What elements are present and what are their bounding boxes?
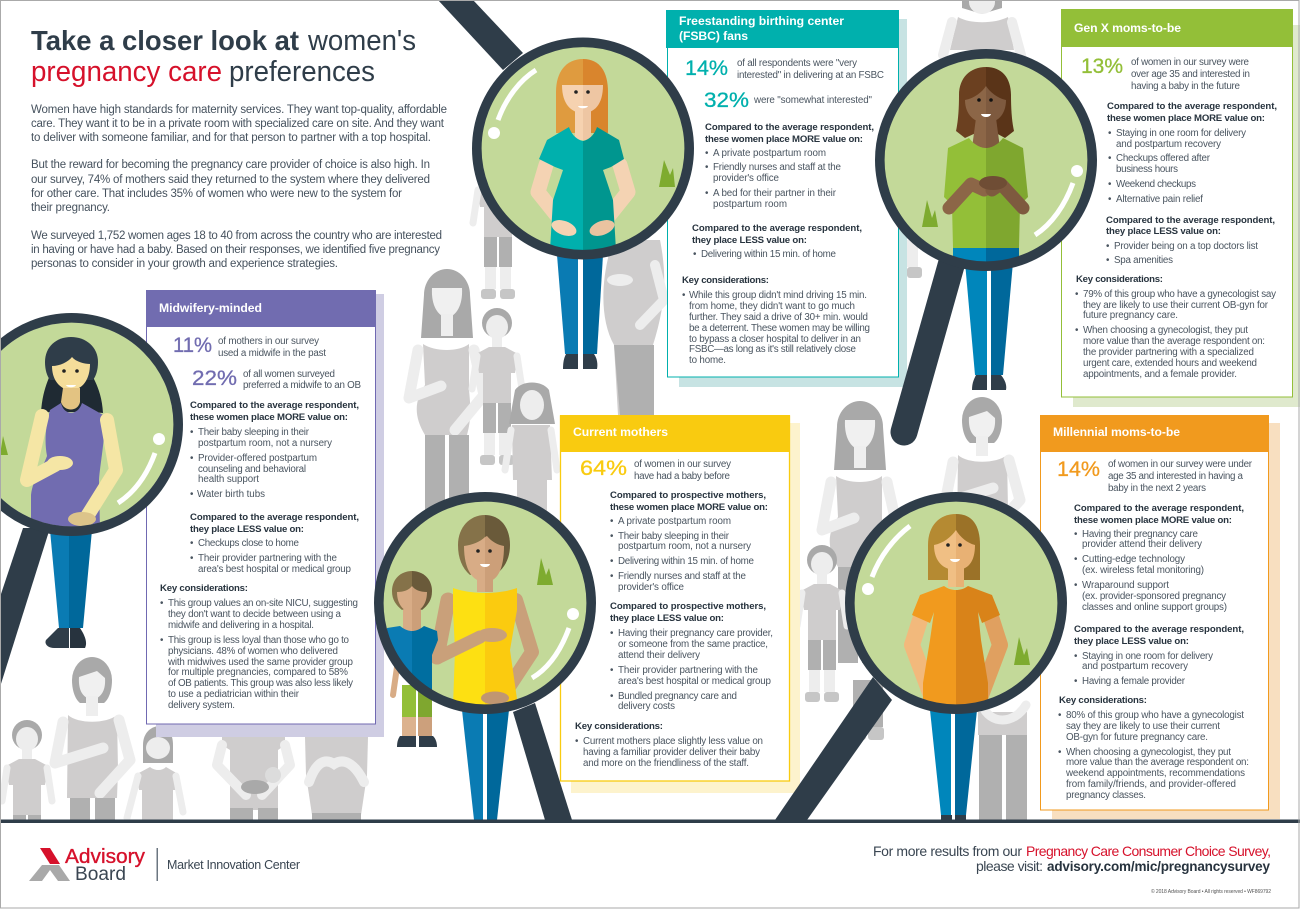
key considerations: from home, they didn't want to go much bbox=[689, 301, 855, 312]
list: less value: Provider being on a top doctors list bbox=[1114, 241, 1258, 252]
key considerations: 80% of this group who have a gynecologist bbox=[1066, 710, 1244, 721]
list: more value: and postpartum recovery bbox=[1116, 139, 1221, 150]
list: more value: these women place MORE value on: bbox=[190, 412, 348, 423]
key considerations bbox=[682, 275, 870, 366]
key considerations: • bbox=[682, 290, 686, 301]
woman in lens bbox=[922, 67, 1028, 262]
list: less value: delivery costs bbox=[618, 701, 675, 712]
list: less value: Their provider partnering with the bbox=[618, 665, 759, 676]
magnifier: Millennial mom-to-be bbox=[775, 497, 1062, 820]
key considerations: midwife and delivering in a hospital. bbox=[168, 620, 314, 631]
list: less value: they place LESS value on: bbox=[610, 613, 724, 624]
key considerations: they don't want to decide between using a bbox=[168, 609, 342, 620]
title bbox=[31, 25, 416, 88]
key considerations: of OB patients. This group was also less likely bbox=[168, 678, 353, 689]
title: Take a closer look at bbox=[31, 25, 299, 56]
magnifier: FSBC fan bbox=[438, 0, 689, 369]
key considerations: When choosing a gynecologist, they put bbox=[1066, 747, 1231, 758]
key considerations bbox=[160, 583, 358, 711]
stat: 14%: of all respondents were "very bbox=[737, 58, 857, 69]
lens highlight bbox=[118, 433, 165, 503]
list: more value: postpartum room bbox=[713, 199, 787, 210]
key considerations bbox=[1058, 695, 1249, 801]
list: more value: provider attend their delivery bbox=[1082, 539, 1202, 550]
list: more value: Weekend checkups bbox=[1116, 179, 1196, 190]
lens highlight bbox=[1035, 165, 1083, 235]
panel header: Millennial moms-to-be bbox=[1053, 425, 1180, 439]
list: more value: Cutting-edge technology bbox=[1082, 554, 1185, 565]
intro text: our survey, 74% of mothers said they returned to the system where they delivered bbox=[31, 174, 430, 186]
key considerations: OB-gyn for future pregnancy care. bbox=[1066, 732, 1208, 743]
panel header bbox=[666, 10, 899, 48]
stat: 14%: interested" in delivering at an FSBC bbox=[737, 70, 884, 81]
panel header: Freestanding birthing center bbox=[679, 14, 844, 28]
key considerations: with midwives used the same provider group bbox=[167, 657, 354, 668]
copyright: © 2018 Advisory Board • All rights reserved • WF869792 bbox=[1151, 888, 1271, 895]
logo: Advisory Board: Advisory bbox=[65, 846, 145, 868]
stat: 32%: 32% bbox=[704, 88, 749, 112]
key considerations: and more on the friendliness of the staff. bbox=[583, 758, 749, 769]
list: more value: Compared to the average respondent, bbox=[705, 122, 874, 133]
stat: 13%: over age 35 and interested in bbox=[1131, 69, 1250, 80]
list: less value: and postpartum recovery bbox=[1082, 661, 1188, 672]
key considerations: 79% of this group who have a gynecologist say bbox=[1083, 289, 1276, 300]
list: less value: • bbox=[610, 691, 614, 702]
stat: 14%: 14% bbox=[1057, 457, 1100, 481]
stat: 14%: age 35 and interested in having a bbox=[1108, 471, 1244, 482]
stat: 13% bbox=[1081, 54, 1250, 92]
lens bbox=[854, 501, 1058, 705]
list: less value: area's best hospital or medical group bbox=[198, 564, 352, 575]
intro text: to deliver with someone familiar, and for that person to partner with a top hospital. bbox=[31, 132, 431, 144]
list: more value: • bbox=[1108, 194, 1112, 205]
stat: 22%: of all women surveyed bbox=[243, 369, 335, 380]
list: more value: Water birth tubs bbox=[197, 489, 265, 500]
footer call to action: Pregnancy Care Consumer Choice Survey, bbox=[1026, 843, 1271, 859]
woman in lens bbox=[0, 337, 116, 530]
list: less value: • bbox=[1106, 241, 1110, 252]
list: less value: • bbox=[610, 665, 614, 676]
lens ring bbox=[379, 497, 591, 709]
list: more value: • bbox=[1074, 580, 1078, 591]
list: more value: • bbox=[1074, 554, 1078, 565]
list: less value: Compared to the average respondent, bbox=[1106, 215, 1275, 226]
list: less value: Their provider partnering with the bbox=[198, 553, 338, 564]
key considerations: Key considerations: bbox=[160, 583, 248, 594]
key considerations: Key considerations: bbox=[1059, 695, 1147, 706]
key considerations: • bbox=[575, 736, 579, 747]
woman in lens bbox=[538, 59, 675, 250]
stat: 32% bbox=[704, 88, 873, 112]
list: less value: Delivering within 15 min. of home bbox=[701, 249, 837, 260]
figure legs bbox=[557, 255, 603, 369]
list: less value: they place LESS value on: bbox=[1106, 226, 1221, 237]
panel drop shadow bbox=[1052, 423, 1280, 819]
magnifier: current mother and child bbox=[379, 497, 591, 820]
list: more value bbox=[190, 400, 359, 500]
lens bbox=[383, 501, 587, 705]
list: more value: Their baby sleeping in their bbox=[618, 531, 730, 542]
list: more value: • bbox=[610, 516, 614, 527]
key considerations: Key considerations: bbox=[682, 275, 769, 286]
stat: 64%: have had a baby before bbox=[634, 471, 731, 482]
footer call to action: For more results from our bbox=[873, 843, 1022, 859]
list: less value: • bbox=[1074, 651, 1078, 662]
figure legs bbox=[462, 710, 509, 820]
magnifier handle bbox=[438, 0, 523, 70]
stat: 64%: 64% bbox=[580, 456, 627, 480]
list: less value: Having a female provider bbox=[1082, 676, 1186, 687]
panel drop shadow bbox=[156, 294, 384, 737]
child lower body bbox=[393, 667, 437, 747]
list: less value: Bundled pregnancy care and bbox=[618, 691, 737, 702]
list: more value: A private postpartum room bbox=[618, 516, 731, 527]
key considerations: • bbox=[1075, 325, 1079, 336]
crowd of gray background figures bbox=[2, 0, 1027, 877]
list: more value: • bbox=[190, 427, 194, 438]
list: less value: they place LESS value on: bbox=[692, 235, 807, 246]
stat: 22% bbox=[192, 366, 361, 391]
panel header bbox=[146, 290, 376, 327]
list: more value: A private postpartum room bbox=[713, 148, 826, 159]
panel body bbox=[146, 291, 376, 724]
panel body bbox=[560, 416, 790, 781]
panel: Millennial moms-to-be bbox=[1040, 415, 1280, 819]
key considerations: having a familiar provider deliver their baby bbox=[583, 747, 760, 758]
mother and child in lens bbox=[385, 515, 553, 706]
stat: 22%: preferred a midwife to an OB bbox=[243, 380, 361, 391]
intro text: But the reward for becoming the pregnancy care provider of choice is also high. In bbox=[31, 159, 430, 171]
list: more value: business hours bbox=[1116, 164, 1178, 175]
panel drop shadow bbox=[679, 19, 907, 387]
panel header: Current mothers bbox=[573, 425, 668, 439]
list: more value: • bbox=[610, 556, 614, 567]
list: less value: Compared to the average respondent, bbox=[1074, 624, 1244, 635]
list: less value bbox=[692, 223, 862, 260]
key considerations: FSBC—as long as it's still relatively close bbox=[689, 344, 857, 355]
key considerations: Key considerations: bbox=[575, 721, 663, 732]
list: more value: • bbox=[705, 162, 709, 173]
intro text: Women have high standards for maternity services. They want top-quality, affordable bbox=[31, 104, 447, 116]
woman in lens bbox=[912, 514, 1030, 706]
list: less value: Compared to prospective mothers, bbox=[610, 601, 766, 612]
list: more value: Checkups offered after bbox=[1116, 153, 1211, 164]
key considerations: pregnancy classes. bbox=[1066, 790, 1146, 801]
key considerations: future pregnancy care. bbox=[1083, 310, 1178, 321]
list: more value: these women place MORE value on: bbox=[1107, 113, 1265, 124]
stat: 11%: used a midwife in the past bbox=[218, 348, 326, 359]
lens highlight bbox=[862, 526, 910, 595]
list: more value: Compared to the average respondent, bbox=[1074, 503, 1244, 514]
key considerations: • bbox=[1075, 289, 1079, 300]
lens highlight bbox=[532, 608, 579, 678]
footer call to action: advisory.com/mic/pregnancysurvey bbox=[1047, 859, 1270, 874]
magnifier handle bbox=[0, 528, 50, 687]
list: more value: these women place MORE value on: bbox=[705, 134, 863, 145]
list: less value: Compared to the average respondent, bbox=[692, 223, 862, 234]
key considerations: This group is less loyal than those who go to bbox=[168, 635, 350, 646]
list: more value: provider's office bbox=[618, 582, 685, 593]
key considerations: delivery system. bbox=[168, 700, 235, 711]
list: more value: • bbox=[1108, 153, 1112, 164]
footer bbox=[0, 820, 1300, 909]
panel body bbox=[1040, 416, 1268, 810]
key considerations: Key considerations: bbox=[1076, 274, 1163, 285]
list: more value: Alternative pain relief bbox=[1116, 194, 1203, 205]
lens bbox=[884, 58, 1088, 262]
logo: Advisory Board: Market Innovation Center bbox=[167, 858, 300, 872]
key considerations: to bypass a closer hospital to deliver in an bbox=[689, 334, 861, 345]
key considerations: to use a pediatrician within their bbox=[168, 689, 300, 700]
list: less value: Checkups close to home bbox=[198, 538, 300, 549]
figure legs bbox=[930, 710, 977, 820]
list: more value: health support bbox=[198, 474, 259, 485]
list: less value: • bbox=[1106, 255, 1110, 266]
stat: 11% bbox=[173, 333, 326, 359]
stat: 64% bbox=[580, 456, 731, 482]
logo: Advisory Board bbox=[29, 846, 300, 885]
panel drop shadow bbox=[1073, 25, 1300, 407]
key considerations: more value than the average respondent on: bbox=[1083, 336, 1265, 347]
key considerations: While this group didn't mind driving 15 min. bbox=[689, 290, 867, 301]
stat: 14%: baby in the next 2 years bbox=[1108, 483, 1206, 494]
list: less value: attend their delivery bbox=[618, 650, 700, 661]
list: more value: (ex. provider-sponsored pregnancy bbox=[1082, 591, 1226, 602]
title: preferences bbox=[229, 56, 375, 88]
figure legs bbox=[965, 262, 1013, 390]
logo: Advisory Board: Board bbox=[75, 864, 126, 885]
list: more value: Delivering within 15 min. of home bbox=[618, 556, 755, 567]
list: more value: Compared to the average respondent, bbox=[1107, 101, 1277, 112]
stat: 13%: having a baby in the future bbox=[1131, 81, 1241, 92]
stat: 14% bbox=[685, 56, 884, 81]
panel: Gen X moms-to-be bbox=[1061, 9, 1300, 407]
key considerations: Current mothers place slightly less value on bbox=[583, 736, 763, 747]
list: less value: Staying in one room for delivery bbox=[1082, 651, 1213, 662]
list: more value: • bbox=[610, 571, 614, 582]
stat: 22%: 22% bbox=[192, 366, 237, 390]
footer background and rule bbox=[0, 820, 1300, 909]
key considerations: weekend appointments, recommendations bbox=[1065, 768, 1245, 779]
lens ring bbox=[477, 42, 689, 255]
key considerations: When choosing a gynecologist, they put bbox=[1083, 325, 1248, 336]
stat: 13%: 13% bbox=[1081, 54, 1123, 78]
panel: Current mothers bbox=[560, 415, 800, 793]
list: less value bbox=[1074, 624, 1244, 687]
lens ring bbox=[850, 497, 1062, 709]
list: more value: • bbox=[705, 188, 709, 199]
key considerations: This group values an on-site NICU, suggesting bbox=[168, 598, 358, 609]
key considerations bbox=[575, 721, 763, 769]
stat: 14% bbox=[1057, 457, 1253, 494]
footer call to action: please visit: bbox=[976, 858, 1043, 874]
magnifier: midwifery-minded woman bbox=[0, 318, 178, 687]
list: less value: they place LESS value on: bbox=[190, 524, 304, 535]
key considerations: further. They said a drive of 30+ min. would bbox=[689, 312, 868, 323]
intro text: their pregnancy. bbox=[31, 202, 110, 214]
stat: 14%: of women in our survey were under bbox=[1108, 459, 1253, 470]
list: more value: • bbox=[190, 489, 194, 500]
magnifier handle bbox=[513, 703, 572, 820]
list: less value bbox=[190, 512, 359, 575]
list: less value: • bbox=[190, 553, 194, 564]
panel header: Gen X moms-to-be bbox=[1074, 21, 1181, 35]
intro text: We surveyed 1,752 women ages 18 to 40 from across the country who are interested bbox=[31, 230, 442, 242]
list: less value: they place LESS value on: bbox=[1074, 636, 1189, 647]
key considerations: be a deterrent. These women may be willing bbox=[689, 323, 870, 334]
lens highlight bbox=[488, 70, 536, 139]
figure legs bbox=[45, 530, 92, 648]
key considerations: • bbox=[1058, 710, 1062, 721]
list: more value: Staying in one room for delivery bbox=[1116, 128, 1246, 139]
stat: 14%: 14% bbox=[685, 56, 728, 80]
key considerations: they are likely to use their current OB-gyn for bbox=[1083, 300, 1269, 311]
lens bbox=[481, 46, 685, 250]
list: more value bbox=[705, 122, 874, 210]
list: less value: Having their pregnancy care provider, bbox=[618, 628, 773, 639]
intro text: personas to consider in your growth and experience strategies. bbox=[31, 258, 338, 270]
list: more value: • bbox=[1108, 128, 1112, 139]
list: more value: provider's office bbox=[713, 173, 780, 184]
list: more value: Compared to the average respondent, bbox=[190, 400, 359, 411]
key considerations bbox=[1075, 274, 1276, 380]
list: more value: • bbox=[1074, 529, 1078, 540]
intro text: in having or have had a baby. Based on their responses, we identified five pregnancy bbox=[31, 244, 440, 256]
key considerations: more value than the average respondent on: bbox=[1066, 757, 1249, 768]
list: more value: these women place MORE value on: bbox=[610, 502, 768, 513]
list: more value: classes and online support groups) bbox=[1082, 602, 1227, 613]
title: women's bbox=[307, 25, 416, 57]
list: more value: Having their pregnancy care bbox=[1082, 529, 1199, 540]
list: more value: Compared to prospective mothers, bbox=[610, 490, 766, 501]
intro text: for other care. That includes 35% of women who were new to the system for bbox=[31, 188, 402, 200]
panel: Freestanding birthing center fans bbox=[666, 10, 907, 387]
key considerations: • bbox=[1058, 747, 1062, 758]
footer call to action bbox=[873, 843, 1271, 874]
list: more value: • bbox=[610, 531, 614, 542]
list: less value bbox=[610, 601, 773, 712]
key considerations: physicians. 48% of women who delivered bbox=[168, 646, 338, 657]
panel header bbox=[560, 415, 790, 452]
lens bbox=[0, 322, 174, 526]
list: more value bbox=[610, 490, 768, 593]
stat: 64%: of women in our survey bbox=[634, 459, 731, 470]
list: less value: • bbox=[190, 538, 194, 549]
list: less value: Spa amenities bbox=[1114, 255, 1173, 266]
list: more value: Their baby sleeping in their bbox=[198, 427, 310, 438]
list: more value: Friendly nurses and staff at the bbox=[618, 571, 747, 582]
key considerations: • bbox=[160, 598, 164, 609]
lens ring bbox=[880, 54, 1092, 266]
intro text bbox=[31, 104, 447, 270]
magnifier: Gen X mom-to-be bbox=[880, 54, 1092, 432]
panel header: Midwifery-minded bbox=[159, 301, 262, 315]
list: more value bbox=[1107, 101, 1277, 205]
magnifier handle bbox=[775, 677, 892, 820]
list: more value: • bbox=[190, 453, 194, 464]
panel body bbox=[668, 11, 898, 377]
list: more value: Provider-offered postpartum bbox=[198, 453, 317, 464]
list: less value bbox=[1106, 215, 1275, 266]
magnifier handle bbox=[904, 262, 952, 432]
stat: 13%: of women in our survey were bbox=[1131, 57, 1250, 68]
stat: 11%: of mothers in our survey bbox=[218, 336, 319, 347]
list: more value bbox=[1074, 503, 1244, 613]
key considerations: for multiple pregnancies, compared to 58% bbox=[168, 667, 348, 678]
key considerations: appointments, and a female provider. bbox=[1083, 369, 1237, 380]
panel header bbox=[1040, 415, 1269, 452]
panel drop shadow bbox=[571, 423, 800, 793]
list: less value: area's best hospital or medical group bbox=[618, 676, 772, 687]
stat: 32%: were "somewhat interested" bbox=[753, 95, 873, 106]
panel header: (FSBC) fans bbox=[679, 29, 748, 43]
list: less value: • bbox=[610, 628, 614, 639]
key considerations: the provider partnering with a specialized bbox=[1083, 347, 1254, 358]
lens ring bbox=[0, 318, 178, 531]
key considerations: • bbox=[160, 635, 164, 646]
list: more value: • bbox=[705, 148, 709, 159]
list: more value: these women place MORE value on: bbox=[1074, 515, 1232, 526]
key considerations: from family/friends, and provider-offered bbox=[1066, 779, 1236, 790]
list: more value: postpartum room, not a nursery bbox=[618, 541, 751, 552]
list: less value: Compared to the average respondent, bbox=[190, 512, 359, 523]
panel body bbox=[1062, 10, 1292, 397]
key considerations: urgent care, extended hours and weekend bbox=[1083, 358, 1257, 369]
list: more value: (ex. wireless fetal monitoring) bbox=[1082, 565, 1204, 576]
key considerations: to home. bbox=[689, 355, 726, 366]
list: less value: • bbox=[693, 249, 697, 260]
key considerations: say they are likely to use their current bbox=[1066, 721, 1220, 732]
list: less value: • bbox=[1074, 676, 1078, 687]
title: pregnancy care bbox=[31, 56, 222, 88]
list: more value: counseling and behavioral bbox=[198, 464, 306, 475]
list: less value: or someone from the same practice, bbox=[618, 639, 768, 650]
list: more value: Wraparound support bbox=[1082, 580, 1169, 591]
list: more value: • bbox=[1108, 179, 1112, 190]
stat: 11%: 11% bbox=[173, 333, 212, 357]
list: more value: A bed for their partner in their bbox=[713, 188, 837, 199]
panel header bbox=[1061, 9, 1293, 47]
intro text: care. They want it to be in a private room with specialized care on site. And they want bbox=[31, 118, 445, 130]
panel: Midwifery-minded bbox=[146, 290, 384, 737]
list: more value: postpartum room, not a nursery bbox=[198, 438, 332, 449]
list: more value: Friendly nurses and staff at the bbox=[713, 162, 842, 173]
